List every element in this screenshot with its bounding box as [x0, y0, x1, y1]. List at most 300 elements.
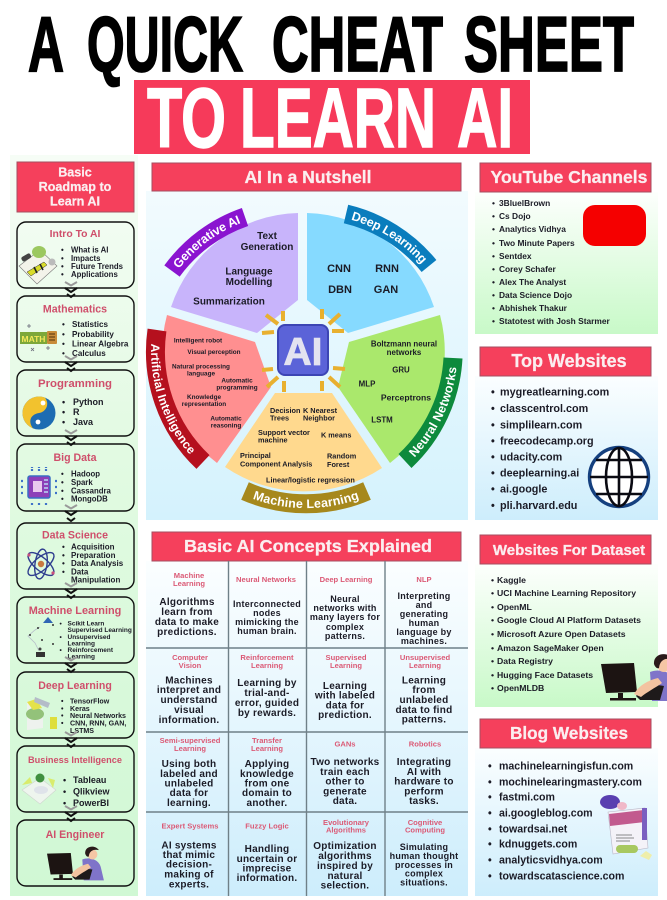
card: Data Science: •: [62, 568, 65, 576]
concept: Computer Vision: Machines: [165, 676, 213, 686]
segment: Artificial Intelligence: Intelligent robot: [174, 338, 223, 344]
card: Data Science: [17, 523, 134, 589]
top websites list: •: [491, 436, 495, 448]
card: Data Science: •: [62, 551, 65, 560]
title: [28, 0, 634, 88]
concept: Fuzzy Logic: [237, 822, 297, 884]
segment: Deep Learning: GAN: [374, 284, 398, 296]
concept: Robotics: Integrating: [397, 757, 451, 768]
YouTube list: •: [492, 238, 495, 248]
card: Big Data: Spark: [71, 478, 93, 487]
concept: Transfer Learning: from one: [245, 778, 290, 790]
concepts grid lines: [146, 561, 468, 896]
card: Deep Learning: CNN, RNN, GAN,: [70, 720, 126, 728]
datasets list: Data Registry: [497, 656, 553, 666]
concept: NLP: Interpreting: [397, 591, 451, 601]
roadmap heading: Roadmap to: [39, 180, 112, 194]
concept: Supervised Learning: data for: [326, 700, 364, 712]
top websites list: udacity.com: [500, 452, 562, 464]
concept: Semi-supervised Learning: labeled and: [160, 769, 218, 780]
card: AI Engineer: AI Engineer: [46, 829, 104, 841]
icon: AI chip hub: [262, 309, 345, 392]
card: Deep Learning: •: [61, 712, 64, 720]
concept: Expert Systems: Expert Systems: [162, 822, 218, 830]
concept: Reinforcement Learning: Learning: [251, 661, 283, 670]
YouTube list: •: [492, 224, 495, 234]
segment: Artificial Intelligence: Natural processing: [172, 364, 230, 370]
YouTube list: •: [492, 264, 495, 274]
card: Big Data: Hadoop: [71, 470, 100, 478]
card: Deep Learning: Deep Learning: [38, 680, 112, 692]
concept: Fuzzy Logic: Fuzzy Logic: [245, 822, 289, 830]
concept: Deep Learning: complex: [326, 622, 364, 632]
card: Mathematics: •: [62, 340, 65, 348]
concept: Unsupervised Learning: [396, 653, 452, 726]
icon: math: MATH: [22, 334, 45, 344]
card: Mathematics: Statistics: [72, 320, 108, 329]
concept: NLP: language by: [396, 627, 452, 637]
datasets list: •: [491, 615, 494, 625]
datasets list: •: [491, 588, 494, 598]
concept: GANs: [311, 740, 380, 807]
concept: Semi-supervised Learning: unlabeled: [165, 778, 213, 790]
YouTube list: Abhishek Thakur: [499, 303, 568, 313]
card: Machine Learning: Supervised Learning: [68, 627, 132, 634]
concept: Semi-supervised Learning: learning.: [167, 798, 211, 809]
top websites list: ai.google: [500, 484, 547, 496]
YouTube list: Two Minute Papers: [499, 238, 575, 248]
chevrons: [65, 282, 77, 286]
concept: Transfer Learning: domain to: [242, 788, 292, 799]
icon: engineer at computer: [47, 847, 104, 880]
concept: Reinforcement Learning: by rewards.: [238, 708, 296, 719]
concept: Cognitive Computing: Computing: [405, 826, 445, 834]
card: Intro To AI: Intro To AI: [50, 229, 100, 240]
blog list: ai.googleblog.com: [499, 808, 593, 820]
concept: Machine Learning: learn from: [161, 607, 213, 618]
YouTube list: 3BluelBrown: [499, 198, 550, 208]
concept: Supervised Learning: Learning: [330, 661, 362, 670]
concept: Semi-supervised Learning: data for: [170, 788, 208, 799]
card: Programming: •: [62, 407, 65, 417]
top websites list: •: [491, 403, 495, 415]
concept: Fuzzy Logic: imprecise: [243, 864, 292, 874]
segment: Machine Learning: Random: [327, 452, 357, 460]
segment: Artificial Intelligence: Visual perception: [187, 349, 241, 356]
concept: Reinforcement Learning: Reinforcement: [240, 653, 294, 662]
segment: Machine Learning: machine: [258, 436, 288, 444]
icon: YouTube: [583, 205, 646, 246]
concept: GANs: Two networks: [311, 757, 380, 768]
top websites list: •: [491, 468, 495, 480]
concept: Computer Vision: Vision: [179, 661, 202, 670]
chevrons: [65, 430, 77, 434]
datasets list: OpenMLDB: [497, 683, 544, 693]
card: Programming: R: [73, 407, 80, 417]
card: Big Data: [17, 444, 134, 511]
concept: Supervised Learning: with labeled: [314, 690, 375, 702]
card: Mathematics: •: [62, 349, 65, 358]
segment: Neural Networks: GRU: [392, 366, 410, 374]
segment: Generative AI: Text: [257, 231, 278, 242]
concept: Evolutionary Algorithms: selection.: [321, 880, 369, 892]
concept: Reinforcement Learning: error, guided: [235, 698, 299, 709]
blog list: kdnuggets.com: [499, 838, 577, 850]
top websites list: •: [491, 500, 495, 512]
concept: Transfer Learning: [240, 736, 294, 809]
concepts heading: Basic AI Concepts Explained: [184, 536, 432, 556]
concept: Cognitive Computing: Cognitive: [408, 818, 442, 827]
concept: Reinforcement Learning: [235, 653, 299, 719]
blog list: •: [488, 854, 492, 866]
roadmap heading: Learn AI: [50, 194, 100, 208]
card: Machine Learning: Learning: [68, 654, 95, 660]
segment: Machine Learning: Trees: [270, 414, 289, 422]
concept: Evolutionary Algorithms: Algorithms: [326, 826, 366, 834]
blog list: machinelearningisfun.com: [499, 760, 633, 772]
icon: globe: [590, 448, 648, 506]
card: Data Science: Data: [71, 568, 89, 576]
icon: person at computer: [601, 654, 667, 701]
segment: Neural Networks: networks: [387, 348, 422, 357]
YouTube list: Analytics Vidhya: [499, 224, 566, 234]
datasets list: •: [491, 629, 494, 639]
segment: Deep Learning: CNN: [327, 263, 351, 275]
chevrons: [65, 732, 77, 736]
icon: deep learning illustration: [26, 697, 57, 730]
title: A: [28, 0, 64, 88]
blog heading: Blog Websites: [510, 723, 628, 743]
concept: Neural Networks: Neural Networks: [236, 575, 296, 584]
YouTube list: •: [492, 316, 495, 326]
segment: Machine Learning: Machine Learning: [253, 490, 359, 508]
concept: Expert Systems: decision-: [166, 860, 212, 870]
concept: Evolutionary Algorithms: inspired by: [317, 861, 373, 872]
concept: Deep Learning: networks with: [313, 603, 377, 613]
concept: Deep Learning: patterns.: [325, 631, 365, 641]
card: Programming: Programming: [38, 378, 112, 390]
YouTube list: •: [492, 277, 495, 287]
card: Mathematics: •: [62, 330, 65, 339]
concept: Expert Systems: that mimic: [163, 850, 215, 861]
datasets list: •: [491, 670, 494, 680]
concept: Computer Vision: information.: [159, 715, 219, 726]
card: Big Data: •: [61, 494, 64, 504]
blog list: •: [488, 808, 492, 820]
datasets list: Amazon SageMaker Open: [497, 643, 604, 653]
concept: Cognitive Computing: situations.: [400, 878, 448, 888]
concept: Machine Learning: Algorithms: [159, 597, 215, 608]
segment: Generative AI: Generation: [241, 242, 293, 253]
YouTube heading: [480, 163, 651, 192]
blog list: towardscatascience.com: [499, 870, 624, 882]
concept: NLP: generating: [400, 609, 448, 619]
YouTube list: Statotest with Josh Starmer: [499, 316, 611, 326]
concept: Unsupervised Learning: from: [412, 685, 436, 696]
blog list: •: [488, 776, 492, 788]
concept: Fuzzy Logic: information.: [237, 873, 297, 884]
concept: Transfer Learning: knowledge: [240, 769, 294, 780]
card: Deep Learning: Keras: [70, 705, 90, 713]
segment: Generative AI: Summarization: [193, 296, 265, 308]
segment: Machine Learning: [225, 393, 382, 514]
concept: Machine Learning: Machine: [174, 571, 204, 580]
concept: Robotics: tasks.: [409, 796, 439, 807]
YouTube list: Data Science Dojo: [499, 290, 572, 300]
card: Mathematics: Mathematics: [43, 304, 107, 316]
concepts heading: [152, 532, 461, 561]
segment: Neural Networks: Perceptrons: [381, 392, 431, 402]
concept: Expert Systems: [161, 822, 218, 890]
chevrons: [65, 583, 77, 586]
concept: Expert Systems: making of: [164, 870, 214, 880]
subtitle banner: LEARN: [240, 71, 436, 165]
segment: Machine Learning: Forest: [327, 460, 350, 469]
segment: Deep Learning: [307, 204, 436, 333]
YouTube list: Cs Dojo: [499, 211, 531, 221]
segment: Machine Learning: Support vector: [258, 428, 310, 437]
datasets list: Google Cloud AI Platform Datasets: [497, 615, 641, 625]
concept: Robotics: perform: [404, 786, 444, 798]
segment: Artificial Intelligence: Automatic: [210, 416, 242, 422]
blog list: •: [488, 870, 492, 882]
card: Big Data: MongoDB: [71, 494, 108, 504]
panel: AI in a nutshell: [146, 162, 468, 520]
concept: Supervised Learning: Learning: [323, 681, 367, 692]
datasets heading: Websites For Dataset: [493, 542, 645, 559]
segment: Machine Learning: Linear/logistic regression: [266, 476, 355, 484]
concept: Deep Learning: Neural: [330, 594, 360, 604]
datasets list: •: [491, 575, 494, 585]
concept: Evolutionary Algorithms: Evolutionary: [323, 818, 370, 827]
blog list: •: [488, 760, 492, 772]
datasets list: OpenML: [497, 602, 532, 612]
card: Data Science: Data Analysis: [71, 559, 124, 568]
card: Business Intelligence: •: [63, 775, 66, 785]
title: CHEAT: [272, 0, 443, 88]
nutshell heading: AI In a Nutshell: [244, 167, 372, 187]
card: AI Engineer: [17, 820, 134, 886]
card: Big Data: Cassandra: [71, 486, 112, 496]
subtitle banner: TO: [147, 71, 226, 165]
concept: Robotics: [394, 740, 454, 807]
concept: Cognitive Computing: processes in: [395, 860, 453, 870]
datasets list: •: [491, 656, 494, 666]
concept: NLP: machines.: [401, 636, 447, 646]
card: Deep Learning: •: [61, 705, 64, 713]
icon: blog illustration: [600, 795, 652, 860]
concept: GANs: GANs: [334, 740, 356, 748]
card: Deep Learning: [17, 672, 134, 738]
blog list: •: [488, 838, 492, 850]
segment: Neural Networks: [338, 315, 462, 468]
datasets list: UCI Machine Learning Repository: [497, 588, 636, 598]
concept: Deep Learning: Deep Learning: [320, 575, 373, 584]
concept: Computer Vision: Computer: [172, 653, 208, 662]
concept: Supervised Learning: prediction.: [318, 710, 372, 721]
datasets list: •: [491, 683, 494, 693]
card: Data Science: Data Science: [42, 530, 108, 542]
concept: NLP: and: [416, 600, 432, 610]
card: Machine Learning: •: [60, 647, 62, 654]
wheel chart: [146, 204, 462, 514]
segment: Artificial Intelligence: reasoning: [211, 422, 241, 430]
segment: Artificial Intelligence: language: [187, 370, 215, 378]
card: Deep Learning: TensorFlow: [70, 698, 110, 706]
segment: Neural Networks: Boltzmann neural: [371, 340, 437, 348]
card: Machine Learning: •: [60, 620, 62, 627]
concept: Cognitive Computing: [390, 818, 458, 888]
top websites list: simplilearn.com: [500, 420, 582, 432]
concept: Deep Learning: [310, 575, 380, 641]
concept: Supervised Learning: [314, 653, 375, 721]
datasets list: •: [491, 643, 494, 653]
chevrons: [65, 505, 77, 508]
concept: GANs: train each: [320, 767, 370, 778]
card: Business Intelligence: Qlikview: [73, 786, 111, 796]
YouTube list: •: [492, 211, 495, 221]
card: Intro To AI: Applications: [71, 270, 118, 279]
concept: Semi-supervised Learning: [160, 736, 221, 809]
card: Programming: •: [62, 417, 65, 427]
YouTube list: •: [492, 303, 495, 313]
concept: Computer Vision: interpret and: [157, 685, 221, 696]
card: Data Science: •: [62, 542, 65, 552]
card: Business Intelligence: •: [63, 798, 66, 808]
card: Machine Learning: Unsupervised: [68, 634, 111, 641]
card: Intro To AI: What is AI: [71, 246, 108, 254]
card: Big Data: •: [61, 470, 64, 478]
YouTube heading: YouTube Channels: [490, 167, 648, 187]
segment: Generative AI: Generative AI: [174, 215, 240, 268]
chevrons: [65, 806, 77, 810]
concept: Expert Systems: experts.: [169, 880, 209, 890]
card: Programming: Java: [73, 417, 94, 427]
card: Mathematics: Probability: [72, 330, 114, 339]
concept: Supervised Learning: Supervised: [326, 653, 367, 662]
segment: Artificial Intelligence: Automatic: [221, 378, 253, 384]
segment: Artificial Intelligence: representation: [182, 401, 226, 408]
card: Deep Learning: Neural Networks: [70, 712, 126, 720]
icon: business analytics: [22, 774, 56, 804]
YouTube list: •: [492, 198, 495, 208]
concept: Transfer Learning: Transfer: [252, 736, 282, 745]
concept: Unsupervised Learning: patterns.: [402, 714, 446, 726]
card: Machine Learning: Machine Learning: [29, 605, 121, 617]
segment: Artificial Intelligence: [146, 315, 271, 469]
card: Intro To AI: [17, 222, 134, 288]
card: Big Data: •: [61, 478, 64, 487]
icon: network of nodes: [28, 617, 54, 657]
segment: Artificial Intelligence: Artificial Intelligence: [151, 344, 194, 454]
card: Deep Learning: •: [61, 720, 64, 728]
card: Business Intelligence: Business Intelligence: [28, 755, 122, 765]
concept: Semi-supervised Learning: Using both: [162, 759, 216, 770]
segment: Generative AI: [164, 208, 298, 333]
icon: data chip: [20, 467, 58, 506]
card: Mathematics: •: [62, 320, 65, 329]
concept: Neural Networks: human brain.: [237, 626, 297, 636]
concept: Robotics: AI with: [407, 767, 441, 778]
card: Intro To AI: •: [61, 270, 64, 279]
datasets list: •: [491, 602, 494, 612]
concept: Computer Vision: understand: [161, 695, 217, 706]
card: Machine Learning: [17, 597, 134, 663]
concept: GANs: data.: [333, 796, 357, 807]
concept: Evolutionary Algorithms: Optimization: [313, 841, 377, 852]
segment: Neural Networks: MLP: [359, 380, 375, 388]
concept: Robotics: hardware to: [394, 776, 454, 788]
card: Business Intelligence: [17, 746, 134, 812]
top websites list: •: [491, 420, 495, 432]
segment: Machine Learning: Principal: [240, 451, 271, 460]
concept: Transfer Learning: Learning: [251, 744, 283, 753]
top websites list: deeplearning.ai: [500, 468, 579, 480]
YouTube list: •: [492, 290, 495, 300]
concept: Cognitive Computing: complex: [405, 868, 443, 878]
card: Big Data: •: [61, 486, 64, 496]
panel: YouTube channels: [475, 163, 658, 334]
card: Deep Learning: •: [61, 698, 64, 706]
top websites heading: Top Websites: [511, 351, 627, 371]
concept: Expert Systems: AI systems: [161, 840, 217, 852]
segment: Machine Learning: K Nearest: [303, 406, 338, 415]
nutshell heading: [152, 163, 461, 191]
blog list: analyticsvidhya.com: [499, 854, 603, 866]
YouTube list: •: [492, 251, 495, 261]
segment: Artificial Intelligence: programming: [216, 384, 258, 392]
concept: Semi-supervised Learning: Learning: [174, 744, 206, 753]
top websites list: •: [491, 484, 495, 496]
card: Intro To AI: •: [61, 246, 64, 254]
card: Machine Learning: •: [60, 634, 62, 641]
datasets list: Microsoft Azure Open Datasets: [497, 629, 626, 639]
icon: AI circuit board: [19, 246, 57, 284]
card: Deep Learning: LSTMS: [70, 727, 94, 735]
card: Mathematics: [17, 296, 134, 362]
concept: Evolutionary Algorithms: natural: [327, 871, 363, 882]
top websites list: freecodecamp.org: [500, 436, 594, 448]
segment: Artificial Intelligence: Knowledge: [187, 394, 221, 401]
concept: Transfer Learning: Applying: [245, 759, 289, 770]
segment: Neural Networks: LSTM: [371, 416, 393, 424]
concept: Evolutionary Algorithms: algorithms: [318, 851, 372, 862]
concept: Unsupervised Learning: unlabeled: [400, 695, 448, 706]
blog heading: [480, 719, 651, 748]
icon: atom: [25, 548, 57, 580]
card: Business Intelligence: Tableau: [73, 775, 106, 785]
roadmap heading: [17, 162, 134, 212]
blog list: mochinelearingmastery.com: [499, 776, 642, 788]
concept: Cognitive Computing: human thought: [390, 851, 458, 861]
concept: Semi-supervised Learning: Semi-supervised: [160, 736, 221, 745]
concept: Computer Vision: visual: [174, 705, 204, 716]
panel: basic roadmap: [10, 155, 138, 896]
concept: Evolutionary Algorithms: [313, 818, 377, 892]
concept: Unsupervised Learning: Unsupervised: [400, 653, 450, 662]
top websites heading: [480, 347, 651, 376]
chevrons: [65, 657, 77, 660]
segment: Machine Learning: Component Analysis: [240, 460, 312, 468]
top websites list: •: [491, 386, 495, 398]
YouTube list: Sentdex: [499, 251, 532, 261]
segment: Machine Learning: K means: [321, 430, 351, 440]
card: Programming: [17, 370, 134, 436]
concept: Neural Networks: [233, 575, 301, 636]
roadmap heading: Basic: [58, 166, 92, 180]
concept: Reinforcement Learning: trial-and-: [244, 688, 290, 699]
card: Data Science: Preparation: [71, 551, 116, 560]
